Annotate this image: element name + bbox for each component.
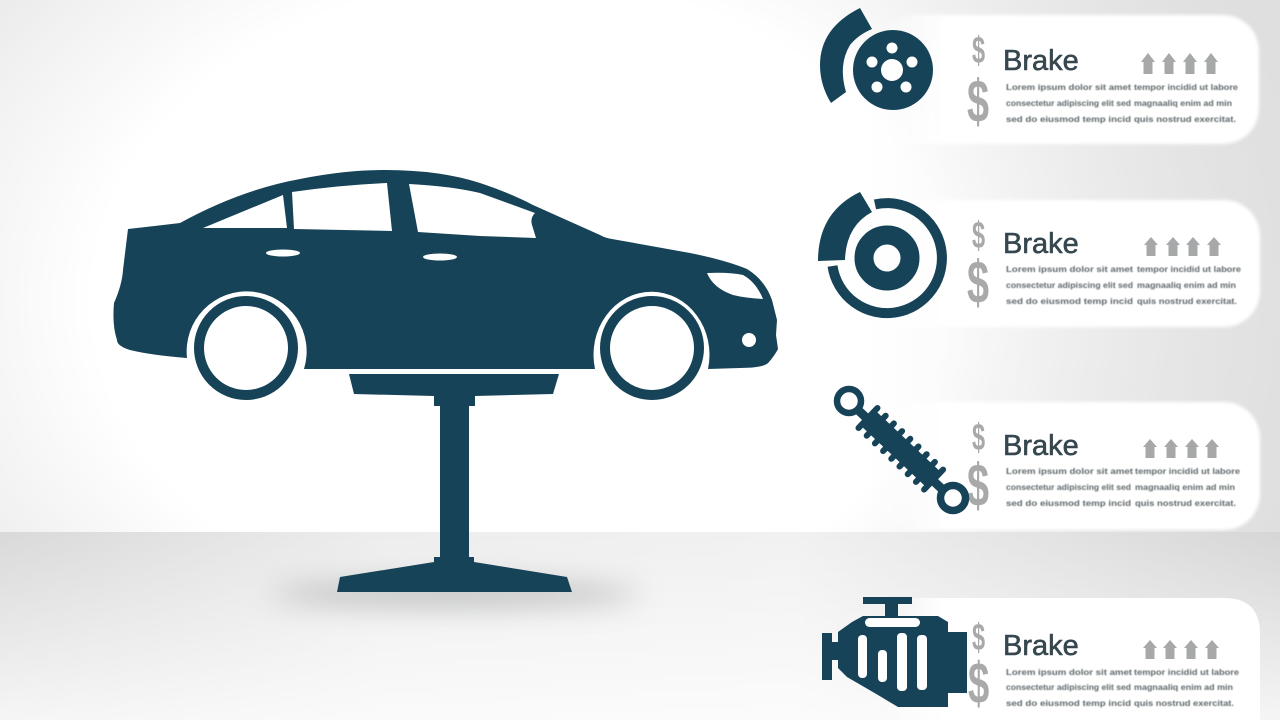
description text: magnaaliq enim ad min bbox=[1137, 281, 1236, 290]
description text: Lorem ipsum dolor sit amet bbox=[1006, 83, 1131, 92]
panel: brake pads bbox=[820, 8, 1259, 144]
description text bbox=[1006, 265, 1242, 306]
car on lift bbox=[113, 170, 778, 592]
description text: tempor incidid ut labore bbox=[1137, 265, 1242, 274]
floor shadow bbox=[270, 581, 640, 607]
icon: four arrows bbox=[1141, 53, 1218, 74]
icon: engine bbox=[822, 597, 967, 707]
front wheel bbox=[605, 301, 699, 395]
description text: tempor incidid ut labore bbox=[1134, 668, 1240, 677]
icon: dollar signs: $ bbox=[972, 28, 985, 71]
panel background bbox=[880, 598, 1260, 720]
description text: sed do eiusmod temp incid bbox=[1006, 499, 1131, 508]
car body bbox=[113, 170, 778, 369]
icon: dollar signs: $ bbox=[968, 652, 989, 716]
icon: brake disc and caliper bbox=[820, 8, 933, 110]
heading: Brake bbox=[1003, 430, 1079, 462]
rear wheel bbox=[199, 301, 293, 395]
description text: magnaaliq enim ad min bbox=[1134, 683, 1233, 692]
icon: dollar signs: $ bbox=[972, 615, 985, 658]
lift stand bbox=[337, 374, 572, 592]
icon: dollar signs: $ bbox=[967, 249, 989, 316]
description text: consectetur adipiscing elit sed bbox=[1006, 483, 1131, 492]
icon: dollar signs bbox=[967, 28, 989, 135]
panel: brake rotor bbox=[818, 192, 1260, 327]
description text bbox=[1006, 668, 1240, 708]
description text: Lorem ipsum dolor sit amet bbox=[1006, 265, 1133, 274]
panel background bbox=[880, 15, 1259, 144]
description text: consectetur adipiscing elit sed bbox=[1006, 683, 1131, 692]
description text: quis nostrud exercitat. bbox=[1134, 699, 1234, 708]
icon: rotor ring and caliper bbox=[818, 192, 942, 313]
description text: tempor incidid ut labore bbox=[1134, 83, 1239, 92]
panel background bbox=[880, 402, 1260, 530]
heading: Brake bbox=[1003, 45, 1079, 77]
heading: Brake bbox=[1003, 630, 1079, 662]
description text: quis nostrud exercitat. bbox=[1134, 115, 1236, 124]
heading: Brake bbox=[1003, 228, 1079, 260]
description text: sed do eiusmod temp incid bbox=[1006, 297, 1133, 306]
panel background bbox=[880, 200, 1260, 327]
description text bbox=[1006, 467, 1241, 508]
icon: dollar signs: $ bbox=[967, 68, 989, 135]
floor bbox=[0, 532, 1280, 720]
description text bbox=[1006, 83, 1239, 124]
description text: Lorem ipsum dolor sit amet bbox=[1006, 668, 1132, 677]
icon: four arrows bbox=[1143, 439, 1219, 458]
icon: dollar signs bbox=[967, 415, 989, 519]
icon: dollar signs: $ bbox=[972, 415, 985, 458]
description text: quis nostrud exercitat. bbox=[1137, 297, 1237, 306]
icon: dollar signs: $ bbox=[967, 452, 989, 519]
description text: consectetur adipiscing elit sed bbox=[1006, 99, 1131, 108]
icon: dollar signs bbox=[968, 615, 989, 716]
description text: tempor incidid ut labore bbox=[1135, 467, 1241, 476]
icon: shock absorber bbox=[837, 389, 966, 510]
icon: dollar signs bbox=[967, 213, 989, 316]
icon: dollar signs: $ bbox=[972, 213, 985, 256]
description text: magnaaliq enim ad min bbox=[1134, 99, 1232, 108]
car windows bbox=[203, 183, 536, 238]
icon: four arrows bbox=[1143, 640, 1219, 659]
description text: sed do eiusmod temp incid bbox=[1006, 115, 1131, 124]
description text: sed do eiusmod temp incid bbox=[1006, 699, 1131, 708]
headlight and fog lamp bbox=[707, 273, 763, 347]
description text: quis nostrud exercitat. bbox=[1135, 499, 1236, 508]
icon: four arrows bbox=[1144, 237, 1221, 256]
description text: magnaaliq enim ad min bbox=[1135, 483, 1235, 492]
description text: Lorem ipsum dolor sit amet bbox=[1006, 467, 1133, 476]
description text: consectetur adipiscing elit sed bbox=[1006, 281, 1133, 290]
panel: engine bbox=[822, 597, 1260, 720]
panel: shock absorber bbox=[837, 389, 1260, 530]
door handles bbox=[266, 250, 457, 260]
